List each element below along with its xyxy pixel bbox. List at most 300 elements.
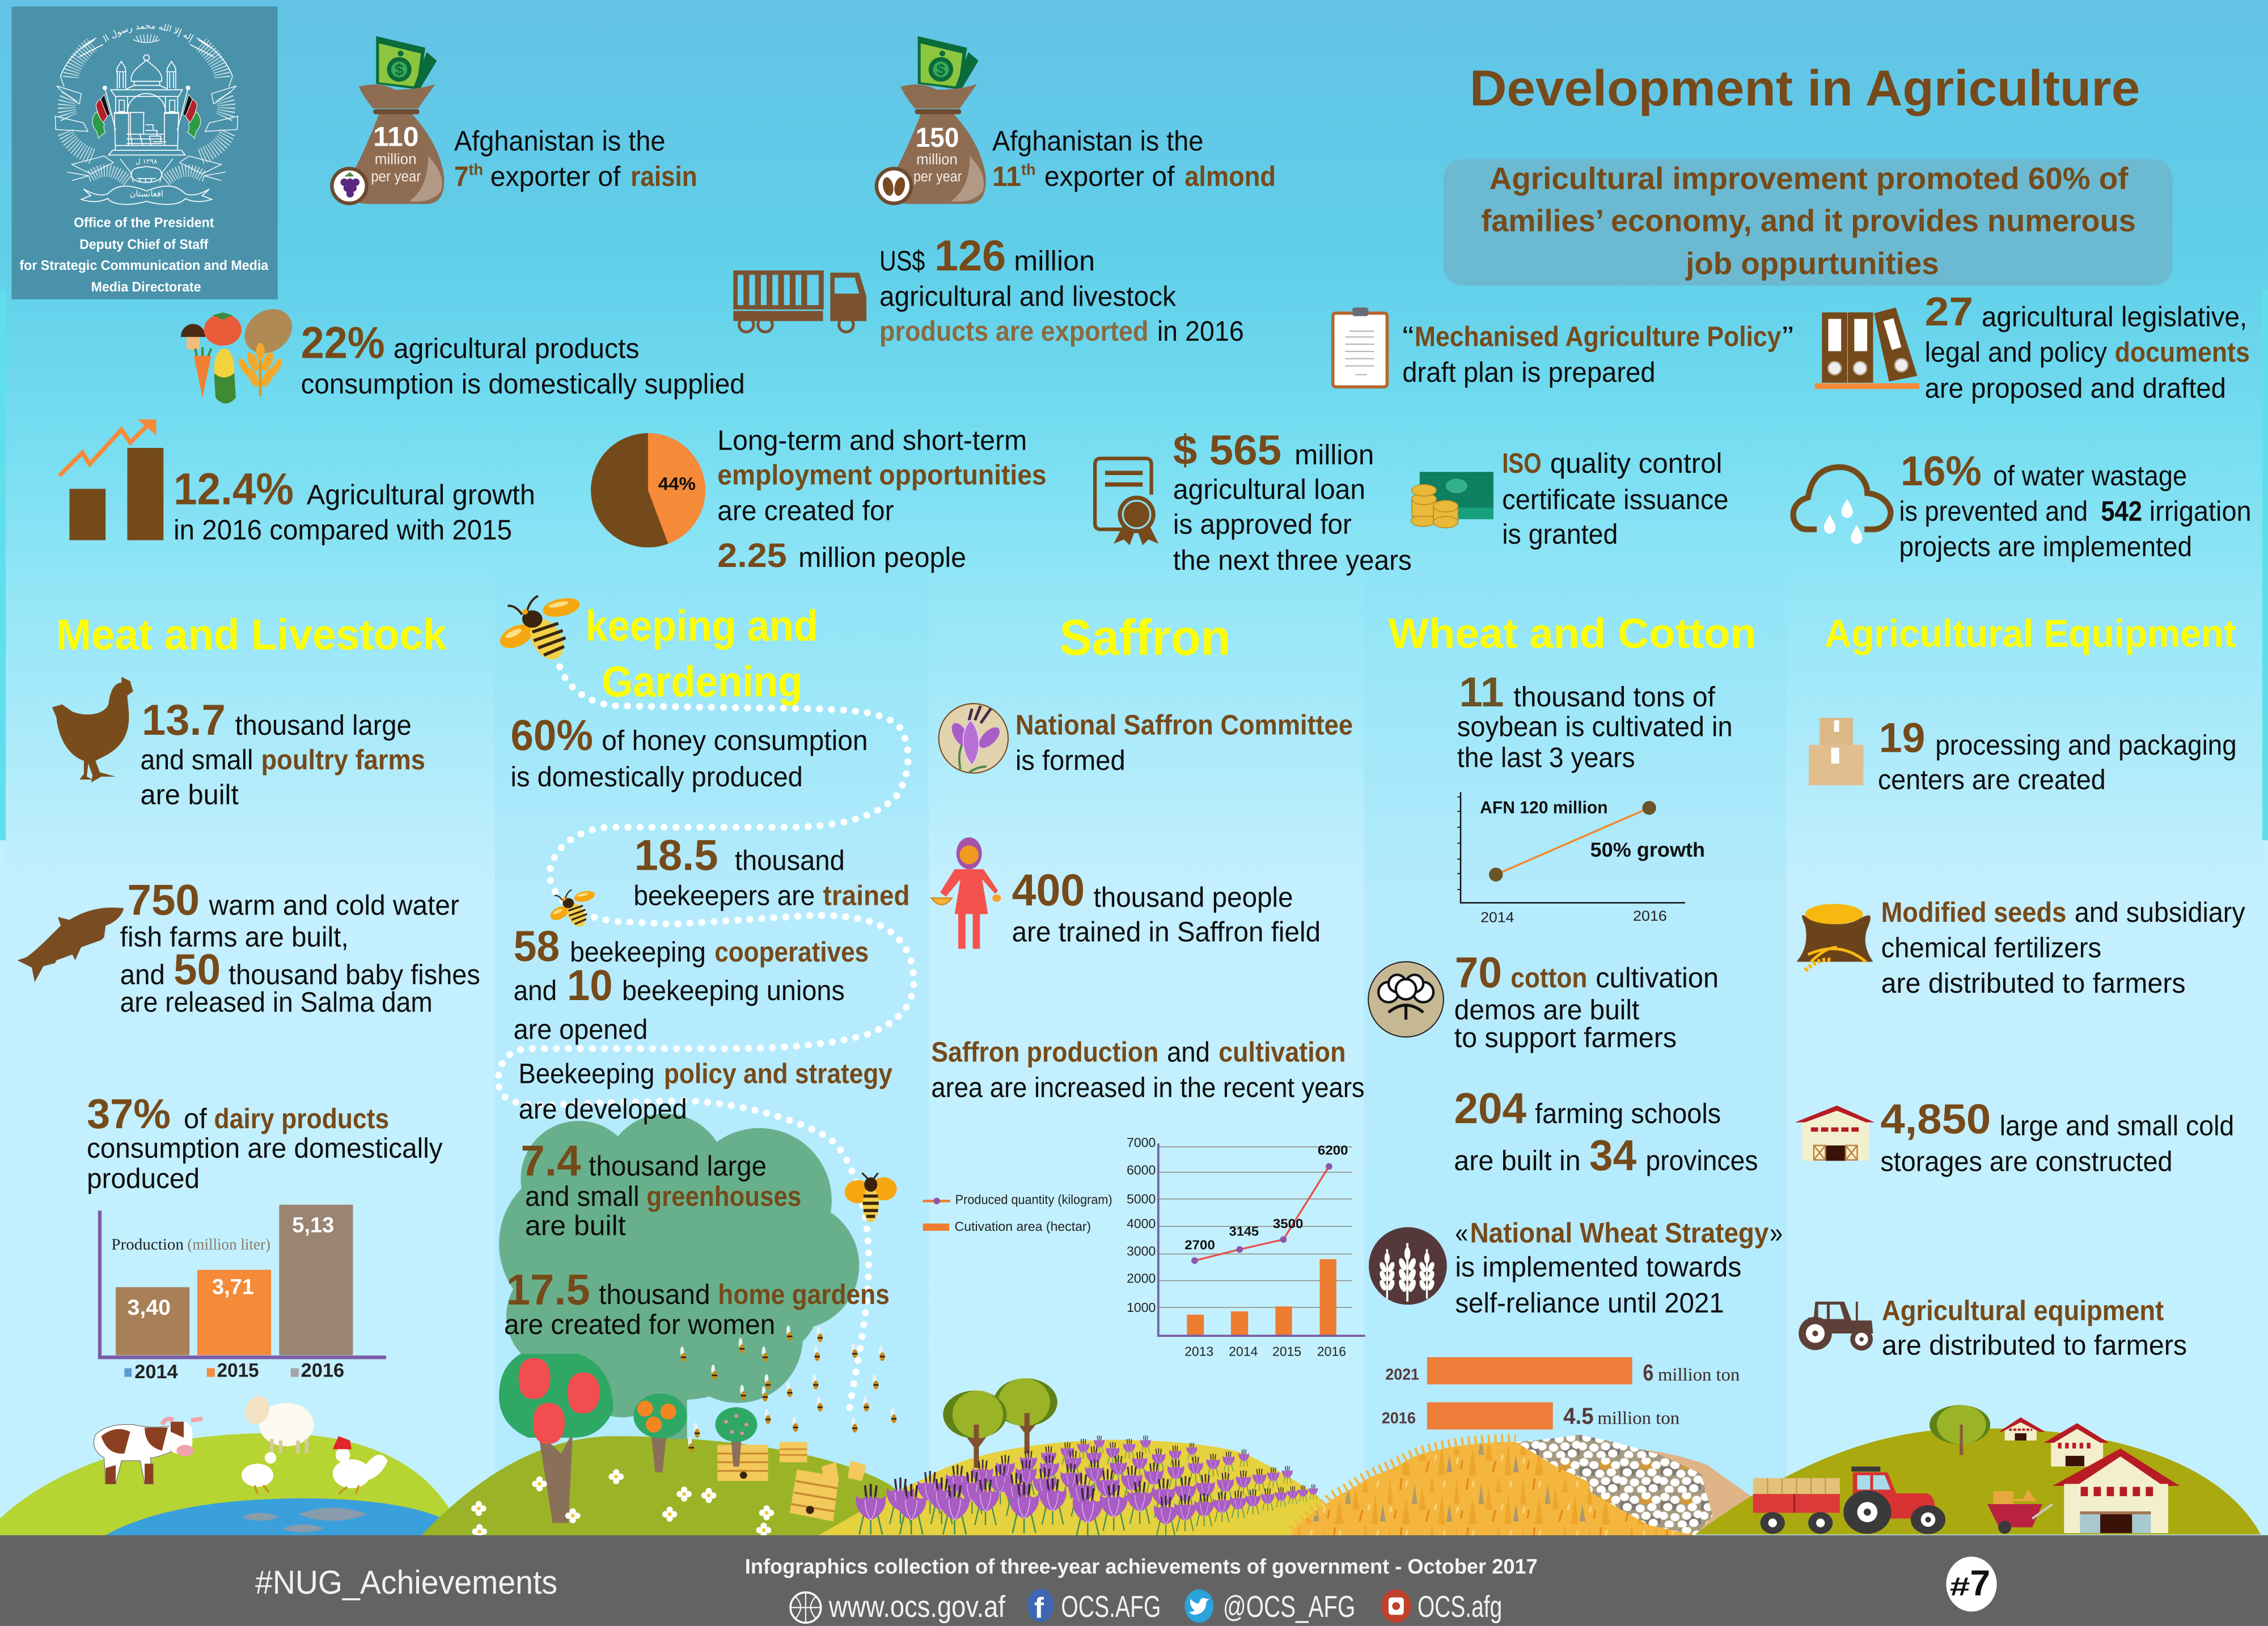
bar chart: dairy production: 2015	[217, 1360, 260, 1381]
icon: clipboard	[1333, 307, 1387, 387]
stat: employment pie: Long-term and short-term	[717, 425, 1027, 457]
stat: 27 documents: 27	[1925, 289, 1973, 334]
stat: raisin exporter: million	[375, 151, 417, 168]
stat: cotton demos: demos are built	[1454, 995, 1640, 1027]
panel: office of the president logo	[11, 7, 278, 299]
pie chart	[591, 433, 705, 548]
stat: employment pie: employment opportunities	[717, 460, 1047, 492]
stat: employment pie: million people	[798, 543, 966, 574]
bar chart: dairy production: 5,13	[292, 1213, 334, 1238]
icon: rooster	[333, 1436, 388, 1494]
text: office lines: for Strategic Communication and Media	[19, 258, 269, 274]
website: www.ocs.gov.af	[828, 1591, 1005, 1624]
stat: ISO certificate	[1411, 448, 1728, 551]
stat: modified seeds: are distributed to farmers	[1881, 968, 2186, 1000]
stat: beekeeping policy	[519, 1058, 892, 1126]
stat: modified seeds: and subsidiary	[2075, 897, 2245, 929]
stat: ISO certificate: certificate issuance	[1502, 485, 1728, 516]
stat: people trained saffron: 400	[1012, 865, 1085, 916]
stat: 27 documents	[1815, 289, 2250, 405]
bar chart: wheat output: 6	[1643, 1362, 1654, 1386]
bar chart: dairy production	[100, 1205, 386, 1383]
stat: farming schools: provinces	[1646, 1145, 1758, 1178]
stat: cotton demos: 70	[1455, 950, 1502, 997]
icon: large bee	[496, 595, 581, 665]
stat: clipboard policy: “	[1402, 321, 1414, 353]
icon: wheelbarrow	[1987, 1490, 2053, 1534]
stat: home gardens: home gardens	[718, 1280, 890, 1311]
stat: national wheat strategy	[1369, 1218, 1783, 1320]
text: saffron production: cultivation	[1218, 1037, 1345, 1069]
stat: loan 565 million: million	[1294, 440, 1374, 472]
stat: water wastage: 542	[2101, 496, 2142, 528]
legend: Cutivation area (hectar)	[955, 1220, 1091, 1234]
line chart: soybean growth	[1457, 792, 1705, 926]
chart: saffron production and area: 5000	[1127, 1192, 1156, 1206]
stat: water wastage: irrigation	[2149, 496, 2252, 528]
stat: 22 percent domestic supply: consumption is domestically supplied	[301, 369, 745, 401]
stat: greenhouses: greenhouses	[646, 1182, 802, 1213]
stat: fish farms: are released in Salma dam	[120, 987, 433, 1019]
stat: 27 documents: legal and policy	[1925, 337, 2108, 369]
bar chart: wheat output	[1382, 1357, 1741, 1430]
stat: cooperatives: are opened	[514, 1014, 648, 1046]
stat: poultry farms	[52, 677, 425, 811]
icon: national emblem: ١٢٩٨ ل	[136, 158, 158, 165]
chart: saffron production and area: 6200	[1318, 1143, 1348, 1158]
stat: home gardens	[504, 1267, 890, 1341]
icon: money bag almond: $	[937, 62, 945, 79]
stat: poultry farms: are built	[140, 780, 239, 811]
icon: cotton boll	[1368, 962, 1444, 1037]
stat: cotton demos: cultivation	[1596, 963, 1719, 994]
title: Development in Agriculture	[1470, 61, 2140, 117]
icon: national emblem: افغانستان	[130, 189, 163, 198]
stat: beekeepers trained: thousand	[735, 845, 845, 877]
icon: truck	[733, 270, 866, 332]
stat: fish farms: 750	[127, 877, 200, 925]
chart: saffron production and area: 2000	[1127, 1271, 1156, 1286]
icon: apple tree	[499, 1354, 613, 1523]
stat: farming schools: 34	[1589, 1132, 1637, 1180]
icon: national emblem: لا إله إلا الله محمد رسول الله	[103, 24, 194, 43]
stat: national wheat strategy: »	[1770, 1218, 1783, 1250]
stat: agricultural equipment: Agricultural equipment	[1882, 1295, 2164, 1327]
stat: greenhouses: 7.4	[521, 1138, 581, 1185]
chart: saffron production and area: 2015	[1272, 1344, 1301, 1358]
text: office lines: Media Directorate	[91, 280, 201, 296]
icon: cardboard boxes	[1809, 718, 1863, 785]
stat: dairy products: of	[184, 1103, 208, 1136]
stat: fish farms: fish farms are built,	[120, 922, 349, 954]
stat: 22 percent domestic supply: agricultural products	[393, 333, 640, 365]
stat: raisin exporter: 110	[373, 123, 419, 153]
stat: beekeepers trained: 18.5	[634, 832, 718, 880]
bar chart: wheat output: 2016	[1382, 1411, 1416, 1428]
stat: exports 126 million: products are exported	[879, 316, 1149, 348]
stat: cooperatives: 10	[567, 963, 613, 1010]
icon: sheep	[242, 1392, 314, 1454]
heading: beekeeping and gardening	[586, 603, 818, 706]
stat: clipboard policy	[1333, 307, 1793, 389]
callout: agricultural improvement: families’ economy, and it provides numerous	[1481, 204, 2136, 239]
text: office lines: Deputy Chief of Staff	[79, 237, 209, 253]
stat: water wastage: 16%	[1901, 449, 1982, 496]
stat: loan 565 million: the next three years	[1173, 545, 1412, 577]
stat: clipboard policy: Mechanised Agriculture Policy	[1415, 321, 1782, 353]
stat: raisin exporter: raisin	[631, 162, 697, 193]
stat: cooperatives: cooperatives	[714, 937, 869, 969]
icon: growth bars and arrow	[60, 420, 163, 540]
stat: raisin exporter: Afghanistan is the	[454, 126, 665, 158]
text: office lines: Office of the President	[74, 215, 215, 231]
icon: big garden tree canopy	[499, 1113, 859, 1439]
stat: almond exporter: 11	[992, 162, 1021, 193]
icon: woman with basket	[932, 837, 1001, 948]
stat: fish farms: thousand baby fishes	[229, 960, 481, 992]
chart: saffron production and area: 3500	[1273, 1216, 1303, 1231]
facebook: OCS.AFG	[1061, 1591, 1161, 1624]
stat: farming schools: 204	[1454, 1086, 1527, 1133]
stat: exports 126 million: 126	[934, 233, 1006, 281]
stat: cooperatives	[514, 924, 869, 1046]
line chart: soybean growth: 50% growth	[1590, 838, 1705, 861]
heading: beekeeping and gardening: Gardening	[602, 659, 802, 706]
hill: saffron	[817, 1440, 1328, 1536]
stat: cold storages	[1795, 1097, 2234, 1178]
hill: wheat and cotton	[1290, 1435, 1754, 1535]
stat: saffron committee: National Saffron Committee	[1015, 710, 1353, 742]
stat: water wastage	[1793, 449, 2252, 564]
stat: almond exporter: exporter of	[1044, 162, 1175, 193]
chart: saffron production and area: 2016	[1317, 1344, 1346, 1358]
stat: loan 565 million	[1095, 428, 1412, 577]
stat: national wheat strategy: self-reliance until 2021	[1455, 1288, 1724, 1320]
stat: cotton demos: cotton	[1510, 963, 1587, 994]
stat: fish farms: warm and cold water	[208, 890, 460, 922]
stat: fish farms	[18, 877, 481, 1019]
stat: poultry farms: thousand large	[235, 710, 412, 742]
callout: agricultural improvement: job oppurtunities	[1685, 247, 1939, 281]
hill: farm	[1695, 1428, 2261, 1535]
icon: two trees	[943, 1378, 1057, 1468]
heading: agricultural equipment: Agricultural Equipment	[1825, 612, 2236, 655]
stat: cold storages: storages are constructed	[1880, 1146, 2173, 1178]
stat: home gardens: 17.5	[506, 1267, 590, 1315]
crocus rows	[856, 1436, 1318, 1538]
stat: cooperatives: and	[514, 976, 557, 1007]
facebook: f	[1034, 1593, 1044, 1625]
instagram	[1381, 1590, 1502, 1624]
stat: people trained saffron: are trained in Saffron field	[1012, 917, 1321, 948]
heading: wheat and cotton: Wheat and Cotton	[1388, 612, 1757, 658]
flag left	[92, 86, 116, 138]
icon: saffron flower	[939, 704, 1008, 773]
flowers	[471, 1469, 774, 1539]
twitter: @OCS_AFG	[1223, 1591, 1355, 1624]
stat: farming schools: farming schools	[1535, 1098, 1721, 1130]
illustration: hills and landscape	[0, 1113, 2261, 1539]
bar chart: dairy production: 2014	[134, 1361, 179, 1383]
stat: 12.4 percent growth: 12.4%	[174, 464, 294, 514]
icon: farm tree	[1930, 1405, 1990, 1455]
bar chart: wheat output: million ton	[1658, 1365, 1741, 1385]
stat: national wheat strategy: National Wheat Strategy	[1470, 1218, 1769, 1250]
stat: processing centers: 19	[1879, 716, 1925, 762]
hashtag: #NUG_Achievements	[255, 1564, 557, 1601]
stat: employment pie: 2.25	[717, 536, 787, 574]
stat: exports 126 million	[733, 233, 1244, 348]
stat: greenhouses: are built	[525, 1210, 627, 1242]
stat: agricultural equipment: are distributed to farmers	[1882, 1330, 2187, 1362]
chart: saffron production and area	[923, 1136, 1365, 1358]
icon: money bag raisin: $	[395, 62, 404, 79]
stat: fish farms: and	[120, 960, 165, 992]
stat: almond exporter: per year	[913, 168, 963, 186]
stat: water wastage: projects are implemented	[1899, 532, 2192, 564]
stat: poultry farms: 13.7	[142, 697, 226, 745]
stat: water wastage: of water wastage	[1993, 460, 2187, 493]
stat: almond exporter: 150	[916, 124, 959, 154]
icon: vegetables	[181, 300, 301, 404]
stat: 27 documents: are proposed and drafted	[1925, 373, 2226, 405]
stat: cold storages: 4,850	[1880, 1097, 1991, 1144]
stat: dairy products: dairy products	[214, 1103, 390, 1136]
stat: saffron committee	[939, 704, 1353, 777]
stat: almond exporter: Afghanistan is the	[992, 126, 1203, 158]
bar chart: dairy production: 3,71	[212, 1275, 254, 1300]
chart: saffron production and area: 3000	[1127, 1244, 1156, 1258]
stat: beekeepers trained: beekeepers are	[633, 880, 815, 912]
stat: raisin exporter: per year	[371, 168, 421, 186]
stat: home gardens: thousand	[599, 1280, 710, 1311]
line chart: soybean growth: 2014	[1480, 911, 1515, 926]
stat: exports 126 million: in 2016	[1157, 316, 1244, 348]
hill: livestock	[0, 1433, 463, 1536]
chart: saffron production and area: 2014	[1229, 1344, 1258, 1358]
stat: employment pie: are created for	[717, 496, 895, 527]
stat: poultry farms: and small	[140, 745, 253, 777]
icon: seed sack	[1796, 904, 1873, 971]
icon: red tractor with trailer	[1753, 1467, 1945, 1534]
heading: saffron: Saffron	[1059, 610, 1230, 667]
swarm of small bees	[680, 1326, 896, 1452]
icon: tractor	[1799, 1302, 1873, 1350]
stat: cold storages: large and small cold	[2000, 1111, 2234, 1142]
stat: raisin exporter: th	[469, 162, 484, 179]
stat: beekeepers trained: trained	[823, 880, 910, 912]
stat: loan 565 million: is approved for	[1173, 509, 1352, 541]
stat: modified seeds: Modified seeds	[1881, 897, 2067, 929]
footer title: Infographics collection of three-year achievements of government - October 2017	[745, 1556, 1538, 1580]
stat: soybean: the last 3 years	[1457, 742, 1635, 774]
chart: saffron production and area: 1000	[1127, 1300, 1156, 1315]
stat: people trained saffron: thousand people	[1094, 882, 1293, 914]
stat: dairy products: 37%	[87, 1092, 171, 1138]
icon: storage barn	[1795, 1106, 1875, 1161]
icon: fish silhouette	[18, 908, 124, 982]
stat: farming schools	[1454, 1086, 1758, 1180]
stat: almond exporter: th	[1021, 162, 1036, 179]
stat: dairy products	[87, 1092, 443, 1195]
icon: rain cloud	[1793, 467, 1890, 544]
icon: main barn	[2053, 1449, 2180, 1533]
dotted bee trail	[498, 667, 913, 1410]
stat: processing centers: processing and packaging	[1935, 730, 2237, 762]
icon: money bag raisin	[332, 36, 444, 204]
stat: cotton demos: to support farmers	[1454, 1023, 1677, 1055]
stat: exports 126 million: million	[1014, 246, 1095, 278]
heading: meat and livestock: Meat and Livestock	[56, 612, 447, 659]
icon: pink blossom tree	[715, 1407, 757, 1467]
stat: ISO certificate: ISO	[1502, 448, 1542, 480]
icon: money bag almond	[877, 36, 986, 204]
stat: raisin exporter: exporter of	[490, 162, 621, 193]
text: office lines	[19, 215, 269, 296]
stat: loan 565 million: agricultural loan	[1173, 475, 1365, 506]
bar chart: wheat output: 2021	[1385, 1367, 1419, 1384]
bar chart: dairy production: 3,40	[127, 1296, 171, 1320]
stat: modified seeds: chemical fertilizers	[1881, 933, 2102, 964]
stat: farming schools: are built in	[1454, 1145, 1581, 1178]
icon: binders	[1815, 307, 1919, 389]
stat: agricultural equipment	[1799, 1295, 2187, 1362]
stat: dairy products: produced	[87, 1163, 200, 1195]
stat: 22 percent domestic supply	[181, 300, 745, 404]
stat: soybean: soybean is cultivated in	[1457, 712, 1733, 743]
legend	[923, 1192, 1112, 1234]
stat: clipboard policy: draft plan is prepared	[1402, 357, 1656, 389]
stat: almond exporter: almond	[1184, 162, 1276, 193]
stat: beekeeping policy: are developed	[519, 1094, 687, 1126]
chart: saffron production and area: 3145	[1229, 1224, 1259, 1239]
stat: fish farms: 50	[174, 947, 221, 994]
stat: water wastage: is prevented and	[1899, 496, 2088, 528]
chart: saffron production and area: 7000	[1127, 1136, 1156, 1150]
hill: garden	[421, 1436, 946, 1536]
bar chart: wheat output: million ton	[1597, 1408, 1681, 1428]
stat: poultry farms: poultry farms	[261, 745, 425, 777]
icon: small farm buildings	[1999, 1417, 2109, 1467]
issue number badge	[1946, 1557, 1997, 1612]
icon: hen	[242, 1452, 276, 1494]
stat: beekeeping policy: policy and strategy	[664, 1058, 892, 1090]
stat: cooperatives: beekeeping	[570, 937, 706, 969]
stat: honey	[511, 713, 868, 794]
heading: beekeeping and gardening: keeping and	[586, 603, 818, 651]
chart: saffron production and area: 4000	[1127, 1216, 1156, 1231]
icon: bee on right	[845, 1173, 897, 1222]
pie chart: 44%	[658, 474, 696, 494]
facebook	[1027, 1589, 1161, 1625]
icon: orange tree	[633, 1394, 687, 1472]
stat: soybean: 11	[1459, 670, 1504, 717]
bar chart: dairy production: 2016	[301, 1360, 345, 1381]
icon: wheat circle	[1369, 1227, 1447, 1305]
stat: 12.4 percent growth	[60, 420, 535, 547]
stat: honey: of honey consumption	[602, 726, 868, 757]
chart: saffron production and area: 2013	[1184, 1344, 1213, 1358]
text: saffron production	[931, 1037, 1365, 1104]
line chart: soybean growth: AFN 120 million	[1480, 798, 1608, 818]
stat: modified seeds	[1796, 897, 2245, 1000]
stat: cooperatives: 58	[514, 924, 560, 971]
text: saffron production: area are increased in the recent years	[931, 1073, 1365, 1104]
icon: banknotes and coins	[1411, 472, 1493, 528]
stat: cotton demos	[1368, 950, 1719, 1055]
stat: exports 126 million: agricultural and livestock	[879, 281, 1177, 313]
stat: 22 percent domestic supply: 22%	[301, 317, 385, 368]
callout: agricultural improvement	[1444, 159, 2173, 286]
icon: national emblem	[54, 24, 238, 205]
stat: national wheat strategy: «	[1455, 1218, 1469, 1250]
stat: home gardens: are created for women	[504, 1309, 775, 1341]
issue number badge: 7	[1970, 1564, 1990, 1604]
stat: raisin exporter	[332, 36, 697, 204]
stat: ISO certificate: is granted	[1502, 519, 1618, 551]
stat: cooperatives: beekeeping unions	[622, 976, 845, 1007]
stat: loan 565 million: $ 565	[1173, 428, 1281, 475]
legend: Produced quantity (kilogram)	[955, 1192, 1112, 1207]
bar chart: dairy production: (million liter)	[187, 1237, 271, 1254]
stat: soybean	[1457, 670, 1733, 774]
stat: processing centers	[1809, 716, 2237, 797]
icon: small bee	[548, 889, 596, 930]
chart: saffron production and area: 6000	[1127, 1163, 1156, 1178]
stat: 12.4 percent growth: in 2016 compared with 2015	[174, 515, 512, 547]
stat: raisin exporter: 7	[454, 162, 469, 193]
stat: 12.4 percent growth: Agricultural growth	[307, 480, 535, 511]
stat: dairy products: consumption are domestically	[87, 1133, 443, 1165]
stat: greenhouses: thousand large	[589, 1151, 767, 1183]
stat: greenhouses	[521, 1138, 802, 1242]
stat: 27 documents: documents	[2115, 337, 2250, 369]
stat: clipboard policy: ”	[1782, 321, 1793, 353]
bar chart: wheat output: 4.5	[1563, 1405, 1594, 1430]
stat: almond exporter: million	[916, 151, 958, 169]
stat: exports 126 million: US$	[879, 246, 925, 278]
stat: soybean: thousand tons of	[1513, 682, 1716, 714]
stat: beekeepers trained	[633, 832, 910, 912]
line chart: soybean growth: 2016	[1633, 909, 1668, 925]
icon: chicken silhouette	[52, 677, 133, 782]
stat: people trained saffron	[932, 837, 1321, 948]
stat: honey: is domestically produced	[511, 762, 803, 794]
issue number badge: #	[1950, 1572, 1970, 1601]
icon: certificate	[1095, 459, 1158, 545]
text: saffron production: and	[1167, 1037, 1210, 1069]
stat: 27 documents: agricultural legislative,	[1982, 302, 2247, 334]
stat: national wheat strategy: is implemented towards	[1455, 1252, 1742, 1284]
instagram: OCS.afg	[1417, 1591, 1502, 1624]
stat: honey: 60%	[511, 713, 593, 760]
stat: ISO certificate: quality control	[1550, 448, 1722, 480]
stat: processing centers: centers are created	[1878, 764, 2106, 797]
bar chart: dairy production: Production	[111, 1237, 184, 1254]
stat: employment pie	[591, 425, 1047, 574]
stat: saffron committee: is formed	[1015, 746, 1125, 777]
icon: cow	[94, 1419, 202, 1484]
stat: greenhouses: and small	[525, 1182, 640, 1213]
twitter	[1184, 1590, 1355, 1624]
stat: beekeeping policy: Beekeeping	[519, 1058, 654, 1090]
stat: almond exporter	[877, 36, 1276, 204]
footer	[0, 1535, 2268, 1626]
callout: agricultural improvement: Agricultural improvement promoted 60% of	[1490, 162, 2130, 196]
text: saffron production: Saffron production	[931, 1037, 1158, 1069]
icon: beehives	[717, 1442, 866, 1522]
chart: saffron production and area: 2700	[1184, 1238, 1215, 1252]
